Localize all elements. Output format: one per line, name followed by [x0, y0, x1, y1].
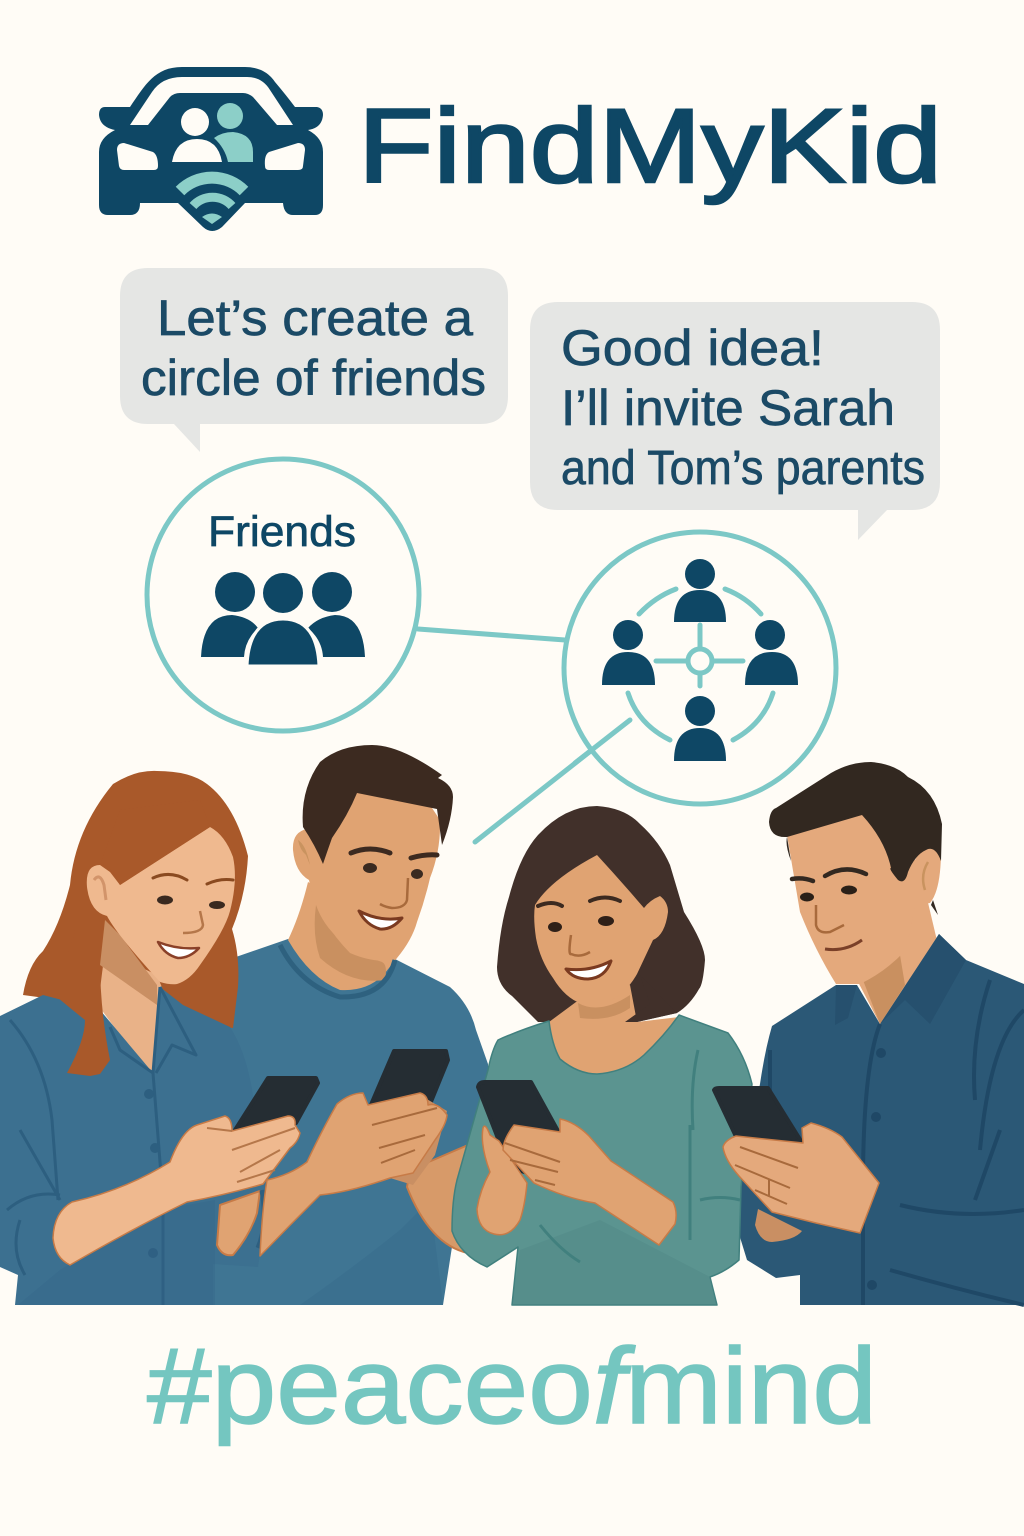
- icon: three people: [201, 572, 365, 666]
- network circle: [564, 532, 836, 804]
- speech bubble: create circle: circle of friends: [141, 350, 486, 406]
- woman in blue shirt: [0, 771, 318, 1305]
- friends circle: [147, 459, 419, 731]
- speech bubble: invite parents: Good idea!: [561, 320, 824, 376]
- hands: [477, 1126, 527, 1235]
- dark-blue shirted man's phone and hands: [714, 1088, 879, 1242]
- phone: [478, 1082, 558, 1175]
- speech bubble: invite parents: [530, 302, 940, 540]
- hashtag: #peaceo fmind: [147, 1325, 877, 1446]
- illustration: four parents using phones: [0, 745, 1024, 1305]
- connector lines: [418, 629, 630, 842]
- speech bubble: create circle: Let’s create a: [157, 290, 473, 346]
- man's far arm and hands with phone: [217, 1051, 468, 1256]
- man in blue t-shirt: [200, 745, 490, 1305]
- friends circle: Friends: [208, 508, 356, 556]
- speech bubble: invite parents: I’ll invite Sarah: [561, 380, 895, 436]
- man in dark blue shirt: torso: [739, 762, 1024, 1305]
- logo: car with family and wifi: [99, 67, 323, 231]
- woman's hand: [53, 1116, 300, 1265]
- brand name: FindMyKid: [358, 88, 942, 205]
- icon: connected people: [602, 559, 798, 761]
- speech bubble: create circle: [120, 268, 508, 452]
- phone: [235, 1078, 318, 1130]
- speech bubble: invite parents: and Tom’s parents: [561, 442, 925, 495]
- woman in teal top: [452, 806, 752, 1305]
